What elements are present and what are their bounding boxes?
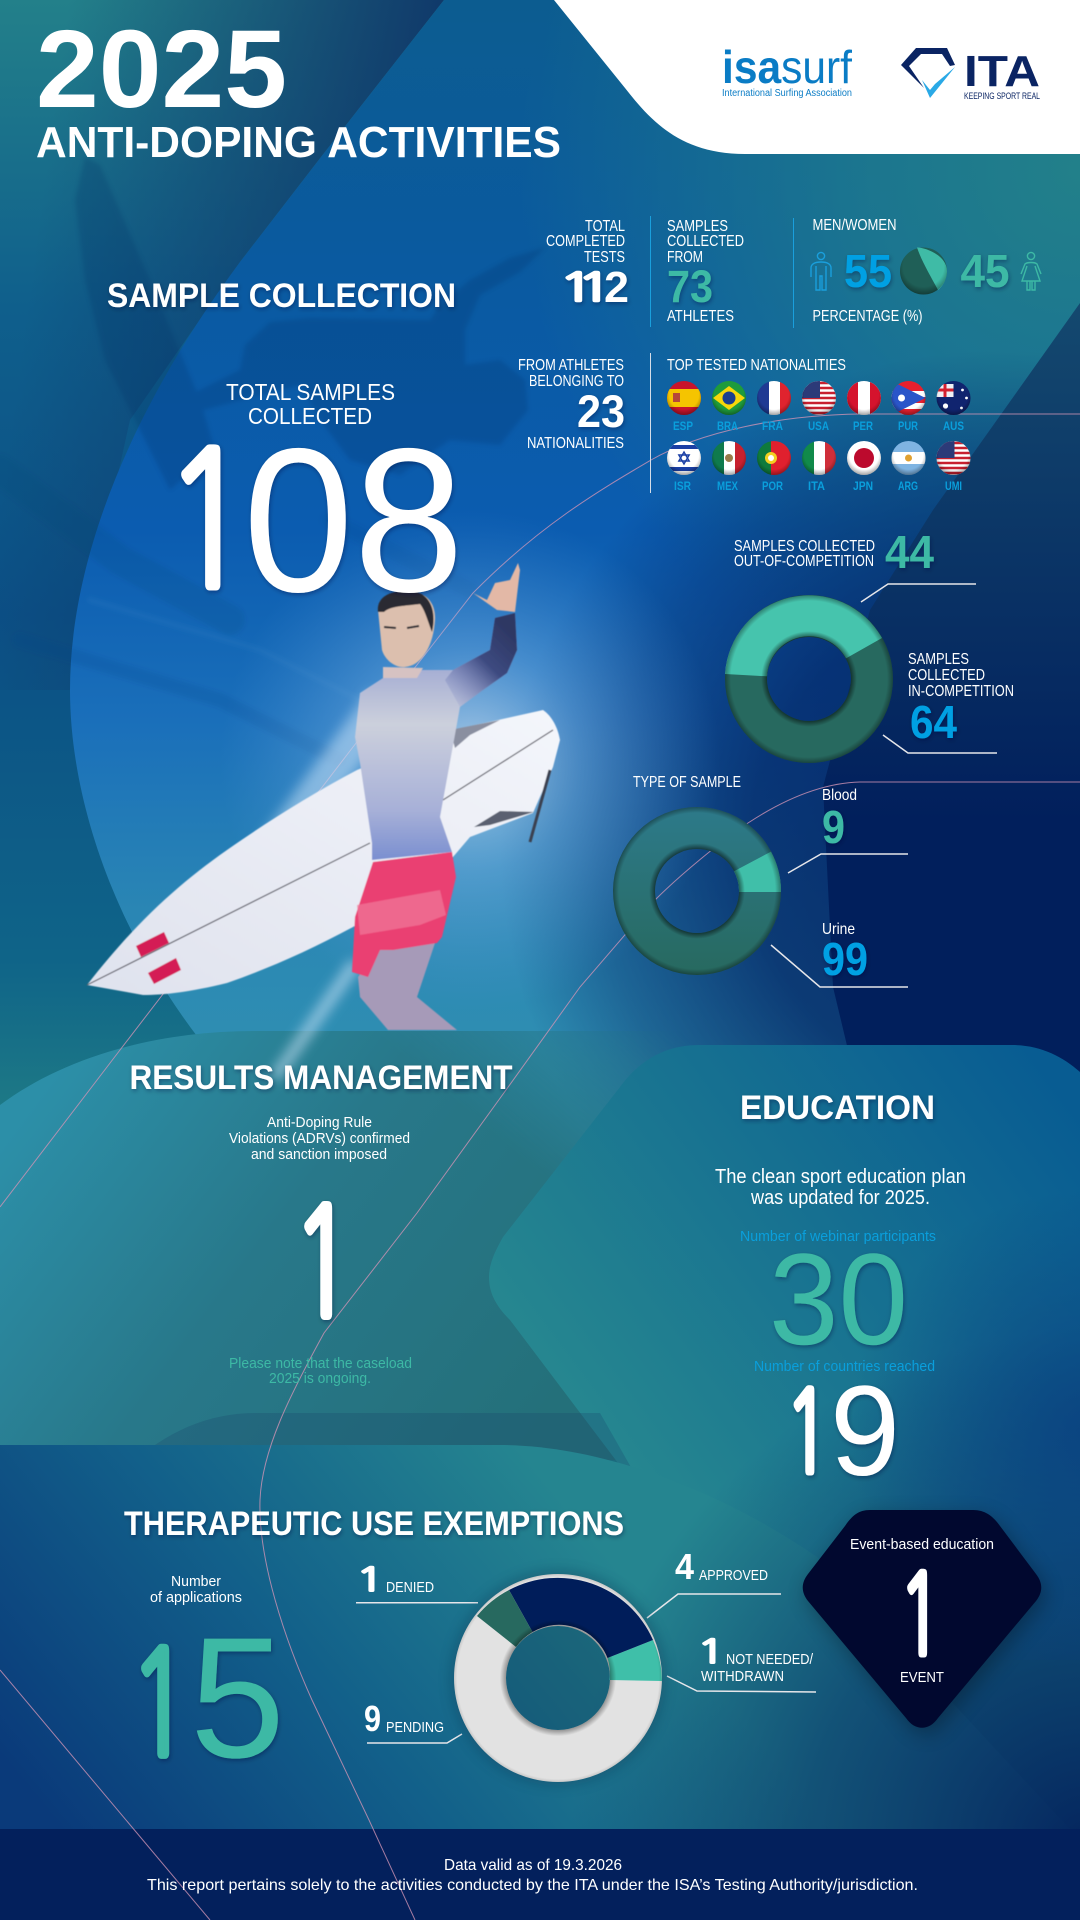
flag: PUR (892, 381, 926, 415)
logo: ITA: KEEPING SPORT REAL (964, 91, 1040, 101)
education text (715, 1166, 966, 1209)
flag: USA (802, 381, 836, 415)
approved label: APPROVED (699, 1567, 768, 1584)
top tested nationalities: POR (762, 479, 783, 493)
stat: samples from athletes: FROM (667, 249, 703, 266)
education text: The clean sport education plan (715, 1166, 966, 1188)
top tested nationalities: AUS (943, 419, 964, 433)
stat: men and women: 45 (960, 245, 1010, 297)
flag: ARG (892, 441, 926, 475)
panel: event-based education: EVENT (900, 1669, 944, 1686)
donut: type of sample (613, 807, 781, 975)
hand (473, 563, 520, 612)
top tested nationalities: FRA (762, 419, 783, 433)
stat: total completed tests: TOTAL (585, 218, 625, 235)
webinar participants: Number of webinar participants (740, 1228, 936, 1245)
stat: total completed tests (546, 218, 629, 312)
total samples label: COLLECTED (248, 403, 372, 429)
title: 2025 (36, 8, 287, 131)
stat: samples from athletes: 73 (667, 261, 713, 312)
in-competition label: 64 (910, 696, 957, 748)
title (36, 8, 561, 167)
logo: ITA: ITA (964, 47, 1040, 96)
footer text: Data valid as of 19.3.2026 (444, 1857, 622, 1874)
pie: men women share (900, 247, 947, 294)
decorative lines (0, 414, 1080, 1920)
flag: ITA (802, 441, 836, 475)
stat: nationalities: BELONGING TO (529, 373, 624, 390)
pending label: PENDING (386, 1719, 444, 1736)
footer text (147, 1857, 918, 1894)
education text: was updated for 2025. (750, 1187, 930, 1209)
stat: samples from athletes: ATHLETES (667, 308, 734, 325)
not needed label: WITHDRAWN (701, 1668, 784, 1685)
flag: AUS (936, 381, 970, 415)
results management panel background (0, 1031, 690, 1460)
flag: MEX (712, 441, 746, 475)
stat: nationalities: FROM ATHLETES (518, 357, 624, 374)
denied label: 1 (356, 1564, 384, 1596)
top tested nationalities: USA (808, 419, 829, 433)
stat: nationalities (518, 357, 625, 452)
out-of-competition label: SAMPLES COLLECTED (734, 538, 875, 555)
out-of-competition label (734, 526, 934, 578)
results note: 2025 is ongoing. (269, 1370, 371, 1387)
title: ANTI-DOPING ACTIVITIES (36, 118, 561, 167)
pending label (364, 1698, 462, 1743)
education panel background (489, 1045, 1080, 1660)
top tested nationalities: TOP TESTED NATIONALITIES (667, 357, 846, 374)
number of applications: of applications (150, 1589, 242, 1606)
flag: ISR (667, 441, 701, 475)
pending label: 9 (364, 1698, 381, 1739)
in-competition label: IN-COMPETITION (908, 683, 1014, 700)
total samples label (226, 379, 395, 429)
approved label (647, 1546, 781, 1618)
not needed label: 1 (697, 1636, 725, 1668)
stat: men and women: 55 (844, 245, 892, 297)
flag: UMI (936, 441, 970, 475)
stat: nationalities: NATIONALITIES (527, 435, 624, 452)
total samples number: 08 (243, 406, 464, 635)
surfboard red logo (136, 932, 169, 957)
stat: total completed tests: 1 (577, 268, 612, 307)
top tested nationalities: JPN (853, 479, 873, 493)
legs (358, 943, 457, 1030)
out-of-competition label: 44 (885, 526, 934, 578)
top tested nationalities: ARG (898, 479, 918, 493)
heading: sample collection: SAMPLE COLLECTION (107, 277, 456, 315)
total samples label: TOTAL SAMPLES (226, 379, 395, 405)
top tested nationalities: BRA (717, 419, 738, 433)
head (378, 592, 435, 667)
fins (450, 720, 500, 748)
top tested nationalities: ISR (674, 479, 691, 493)
torso and arm (355, 613, 517, 860)
top tested nationalities: ESP (673, 419, 693, 433)
panel: event-based education: Event-based education (850, 1536, 994, 1553)
total samples number: 1 (162, 427, 254, 615)
stat: total completed tests: TESTS (584, 249, 625, 266)
flag: POR (757, 441, 791, 475)
out-of-competition label: OUT-OF-COMPETITION (734, 553, 874, 570)
flag: ESP (667, 381, 701, 415)
logo: ITA (901, 47, 1040, 101)
top tested nationalities: ITA (808, 479, 825, 493)
not needed label: NOT NEEDED/ (726, 1651, 814, 1668)
stat: men and women: PERCENTAGE (%) (812, 308, 922, 325)
heading: results management: RESULTS MANAGEMENT (130, 1059, 513, 1097)
panel: event-based education: 1 (899, 1559, 942, 1670)
results text: Anti-Doping Rule (267, 1114, 372, 1131)
approved label: 4 (675, 1546, 694, 1587)
number of applications: 1 (129, 1631, 191, 1776)
top tested nationalities: PUR (898, 419, 918, 433)
number of applications: Number (171, 1573, 221, 1590)
footer text: This report pertains solely to the activities conducted by the ITA under the ISA’s Testing Authority/jurisdiction. (147, 1877, 918, 1894)
countries reached: 1 (785, 1376, 830, 1489)
flag: PER (847, 381, 881, 415)
number of applications: 5 (190, 1602, 285, 1794)
type of sample label: TYPE OF SAMPLE (633, 774, 741, 791)
shorts (352, 852, 456, 977)
logo: isasurf: International Surfing Association (722, 88, 852, 99)
icon: male (811, 252, 831, 290)
not needed label (667, 1636, 816, 1692)
top tested nationalities: MEX (717, 479, 738, 493)
denied label (356, 1564, 478, 1604)
heading: therapeutic use exemptions: THERAPEUTIC USE EXEMPTIONS (124, 1505, 624, 1543)
flag: FRA (757, 381, 791, 415)
heading: education: EDUCATION (740, 1089, 935, 1127)
stat: total completed tests: COMPLETED (546, 233, 625, 250)
top tested nationalities: PER (853, 419, 873, 433)
stat: samples from athletes (667, 218, 744, 325)
results note: Please note that the caseload (229, 1355, 412, 1372)
flag: JPN (847, 441, 881, 475)
stat: total completed tests: 1 (559, 268, 594, 307)
blood label: 9 (822, 801, 845, 853)
stat: men and women: MEN/WOMEN (812, 217, 896, 234)
countries reached: Number of countries reached (754, 1358, 935, 1375)
results text: Violations (ADRVs) confirmed (229, 1130, 410, 1147)
icon: female (1021, 252, 1041, 290)
urine label: Urine (822, 921, 855, 938)
results text (229, 1114, 410, 1163)
number of applications (129, 1573, 285, 1794)
results note (229, 1355, 412, 1387)
panel: event-based education (803, 1510, 1045, 1734)
stat: total completed tests: 2 (604, 263, 629, 312)
lower band background (0, 1190, 1080, 1840)
denied label: DENIED (386, 1579, 434, 1596)
blood label: Blood (822, 787, 857, 804)
stat: men and women (811, 217, 1041, 325)
ocean streaks (0, 470, 470, 760)
in-competition label: SAMPLES (908, 651, 969, 668)
surfboard (87, 710, 560, 995)
countries reached (754, 1358, 935, 1503)
donut: in vs out of competition (725, 595, 893, 763)
flag: BRA (712, 381, 746, 415)
top tested nationalities: UMI (945, 479, 962, 493)
top tested nationalities (667, 357, 970, 493)
in-competition label (908, 651, 1014, 748)
blood label (822, 787, 857, 853)
webinar participants: 30 (769, 1226, 908, 1372)
footer band (0, 1829, 1080, 1920)
stat: nationalities: 23 (577, 386, 625, 437)
surfer glow (220, 510, 720, 1080)
stat: samples from athletes: COLLECTED (667, 233, 744, 250)
background surfer silhouette (75, 157, 546, 490)
stat: samples from athletes: SAMPLES (667, 218, 728, 235)
results text: and sanction imposed (251, 1146, 387, 1163)
countries reached: 9 (830, 1360, 900, 1503)
white logo tab (554, 0, 1080, 154)
in-competition label: COLLECTED (908, 667, 985, 684)
results number: 1 (292, 1188, 354, 1338)
donut: TUE outcomes (450, 1570, 666, 1786)
surfer with surfboard (87, 563, 560, 1030)
urine label: 99 (822, 933, 868, 985)
logo: isasurf: isasurf (722, 41, 852, 93)
